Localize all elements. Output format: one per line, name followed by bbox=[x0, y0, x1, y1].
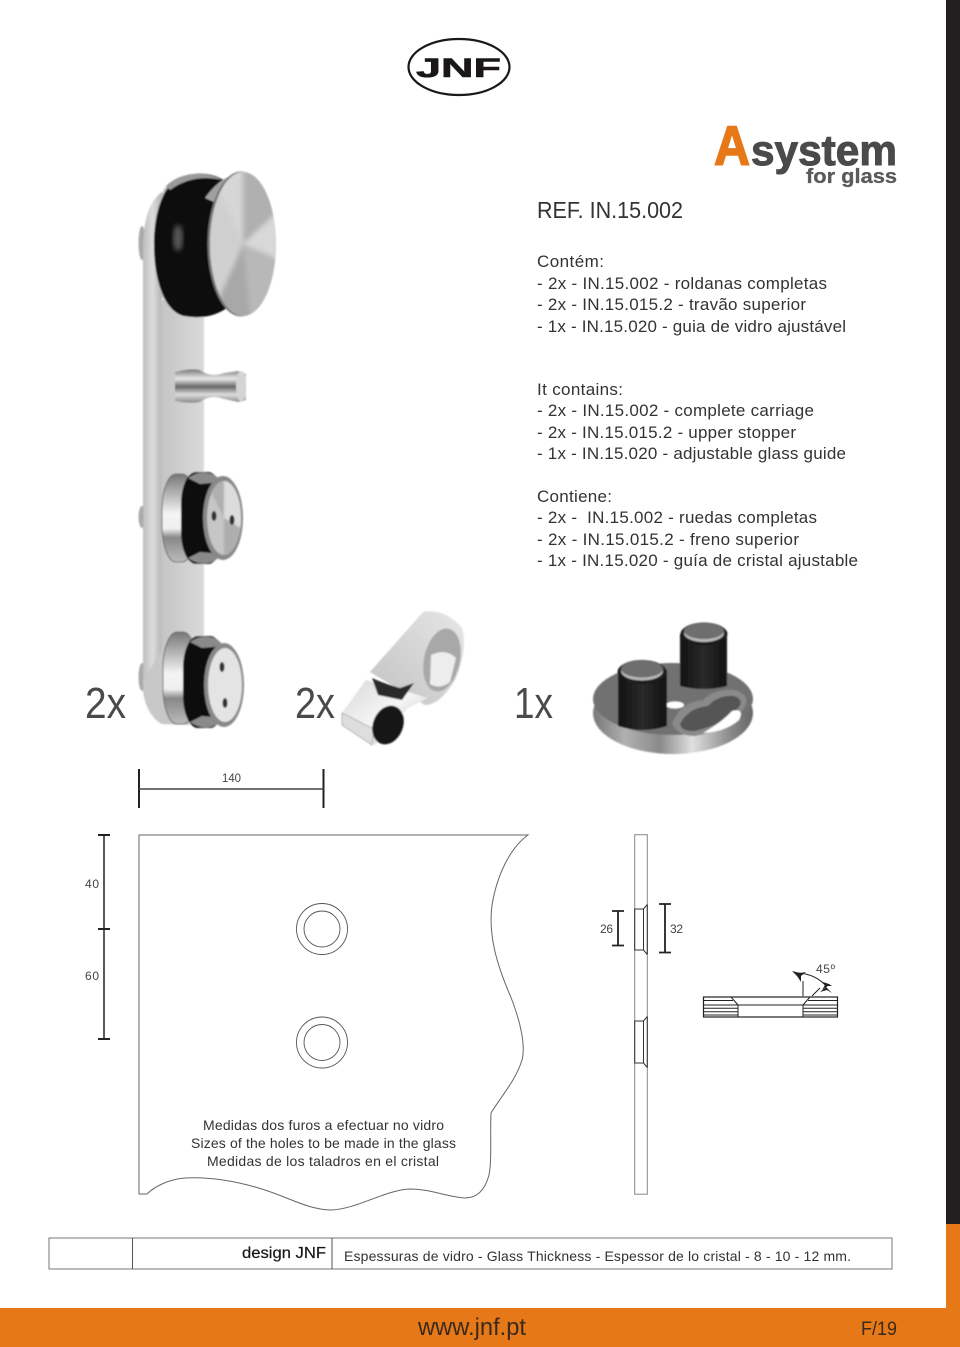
brand: Asystem for glass: for glass bbox=[806, 166, 897, 188]
dimension: 40 and 60 heights bbox=[85, 835, 110, 1039]
dimension: 40 and 60 heights: 60 bbox=[85, 969, 99, 983]
reference heading: REF. IN.15.002 bbox=[537, 197, 683, 223]
brand: Asystem for glass bbox=[714, 114, 897, 188]
glass thickness: Espessuras de vidro - Glass Thickness - Espessor de lo cristal - 8 - 10 - 12 mm. bbox=[344, 1248, 851, 1264]
glass section with 45 degree countersink bbox=[704, 962, 838, 1017]
product photo: adjustable glass guide bbox=[593, 622, 753, 754]
lower roller bbox=[143, 632, 244, 728]
product photo: upper stopper bbox=[342, 611, 466, 749]
text block: Portuguese contents: - 1x - IN.15.020 - guia de vidro ajustável bbox=[537, 317, 846, 336]
brand: Asystem for glass: system bbox=[751, 127, 897, 175]
text block: Portuguese contents: - 2x - IN.15.002 - roldanas completas bbox=[537, 274, 827, 293]
text block: English contents: - 1x - IN.15.020 - adjustable glass guide bbox=[537, 444, 846, 463]
text block: Spanish contents: - 1x - IN.15.020 - guía de cristal ajustable bbox=[537, 551, 858, 570]
caption: hole sizes bbox=[191, 1117, 456, 1169]
dimension: 32 bbox=[659, 904, 683, 952]
design credit: design JNF bbox=[242, 1245, 326, 1262]
text block: Spanish contents: - 2x - IN.15.002 - ruedas completas bbox=[537, 508, 817, 527]
dimension: 32: 32 bbox=[670, 922, 683, 936]
table: design and glass thickness bbox=[49, 1238, 892, 1269]
dimension: 40 and 60 heights: 40 bbox=[85, 877, 99, 891]
text block: Spanish contents: - 2x - IN.15.015.2 - freno superior bbox=[537, 530, 799, 549]
text block: Portuguese contents: - 2x - IN.15.015.2 - travão superior bbox=[537, 295, 806, 314]
text block: English contents: It contains: bbox=[537, 380, 623, 399]
drill hole: lower bbox=[296, 1017, 348, 1068]
back plate bbox=[138, 192, 204, 724]
website: www.jnf.pt bbox=[417, 1314, 526, 1341]
glass panel drawing bbox=[139, 835, 528, 1210]
guide pin bbox=[175, 369, 246, 403]
brand: Asystem for glass: A bbox=[714, 114, 750, 177]
logo: JNF: JNF bbox=[416, 53, 501, 83]
text block: Spanish contents bbox=[537, 487, 858, 570]
text block: Portuguese contents: Contém: bbox=[537, 252, 604, 271]
caption: hole sizes: Sizes of the holes to be made in the glass bbox=[191, 1135, 456, 1151]
text block: Spanish contents: Contiene: bbox=[537, 487, 612, 506]
dimension: 140 width: 140 bbox=[222, 771, 241, 785]
quantity: 2x stopper: 2x bbox=[295, 679, 335, 728]
glass section with 45 degree countersink: 45º bbox=[816, 962, 836, 976]
upper wheel bbox=[153, 170, 276, 318]
page number: F/19 bbox=[861, 1319, 897, 1340]
product photo: roller carriage bbox=[138, 160, 285, 728]
text block: English contents: - 2x - IN.15.015.2 - upper stopper bbox=[537, 423, 796, 442]
middle roller bbox=[162, 472, 244, 564]
text block: English contents: - 2x - IN.15.002 - complete carriage bbox=[537, 401, 814, 420]
caption: hole sizes: Medidas dos furos a efectuar no vidro bbox=[203, 1117, 444, 1133]
right side bar bbox=[946, 0, 960, 1347]
side view of glass bbox=[635, 835, 647, 1194]
text block: English contents bbox=[537, 380, 846, 463]
drill hole: upper bbox=[296, 904, 348, 954]
dimension: 26: 26 bbox=[600, 922, 613, 936]
brushed disc face bbox=[210, 172, 276, 316]
dimension: 26 bbox=[600, 911, 624, 946]
quantity: 1x guide: 1x bbox=[514, 679, 553, 728]
caption: hole sizes: Medidas de los taladros en el cristal bbox=[207, 1153, 439, 1169]
logo: JNF bbox=[408, 39, 510, 95]
text block: Portuguese contents bbox=[537, 252, 846, 336]
quantity: 2x rollers: 2x bbox=[85, 679, 126, 728]
footer band bbox=[0, 1308, 960, 1347]
